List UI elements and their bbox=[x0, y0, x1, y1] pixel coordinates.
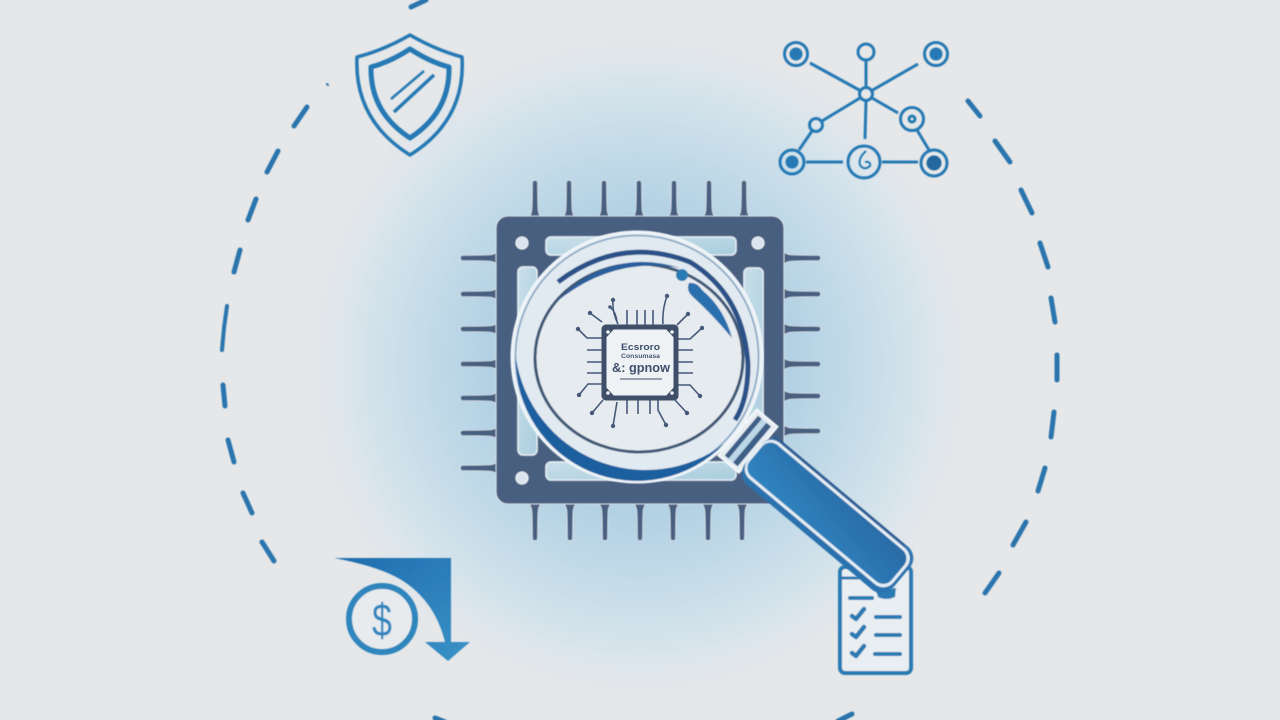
mini chip corner marks bbox=[604, 327, 676, 398]
magnifying glass lens bbox=[512, 232, 762, 482]
lens outer thin ring bbox=[516, 236, 758, 478]
lens top arc bbox=[558, 252, 748, 420]
mini chip body bbox=[604, 327, 676, 398]
magnifying glass handle bbox=[716, 409, 925, 599]
processor chip bbox=[460, 180, 821, 541]
lens glass bbox=[535, 264, 743, 452]
chip body bbox=[496, 216, 784, 504]
icon: network graph bbox=[780, 42, 948, 178]
handle grip bbox=[736, 432, 919, 599]
mini chip label: line 1: Ecsroro bbox=[621, 342, 660, 353]
lens dark crescent bbox=[516, 358, 724, 481]
lens swoosh highlights bbox=[555, 262, 680, 303]
dashed orbit ring bbox=[222, 0, 1057, 720]
mini chip circuit traces bbox=[578, 296, 702, 426]
icon: security shield bbox=[357, 35, 462, 155]
icon: checklist clipboard bbox=[840, 567, 911, 673]
icon: cost reduction arrow with dollar coin: $ bbox=[372, 594, 392, 646]
mini chip label: line 3: &: gpnow bbox=[612, 360, 671, 375]
handle collar bbox=[718, 409, 777, 473]
background glow bbox=[305, 30, 975, 700]
chip pins bbox=[460, 180, 821, 541]
magnified mini chip bbox=[576, 294, 704, 428]
icon: cost reduction arrow with dollar coin bbox=[334, 558, 470, 661]
mini chip label: line 2: Consumasa bbox=[621, 354, 661, 360]
mini chip trace end dots bbox=[576, 294, 704, 428]
chip corner holes bbox=[516, 237, 764, 484]
mini chip underline bbox=[620, 378, 662, 380]
chip inner slots bbox=[518, 237, 763, 480]
